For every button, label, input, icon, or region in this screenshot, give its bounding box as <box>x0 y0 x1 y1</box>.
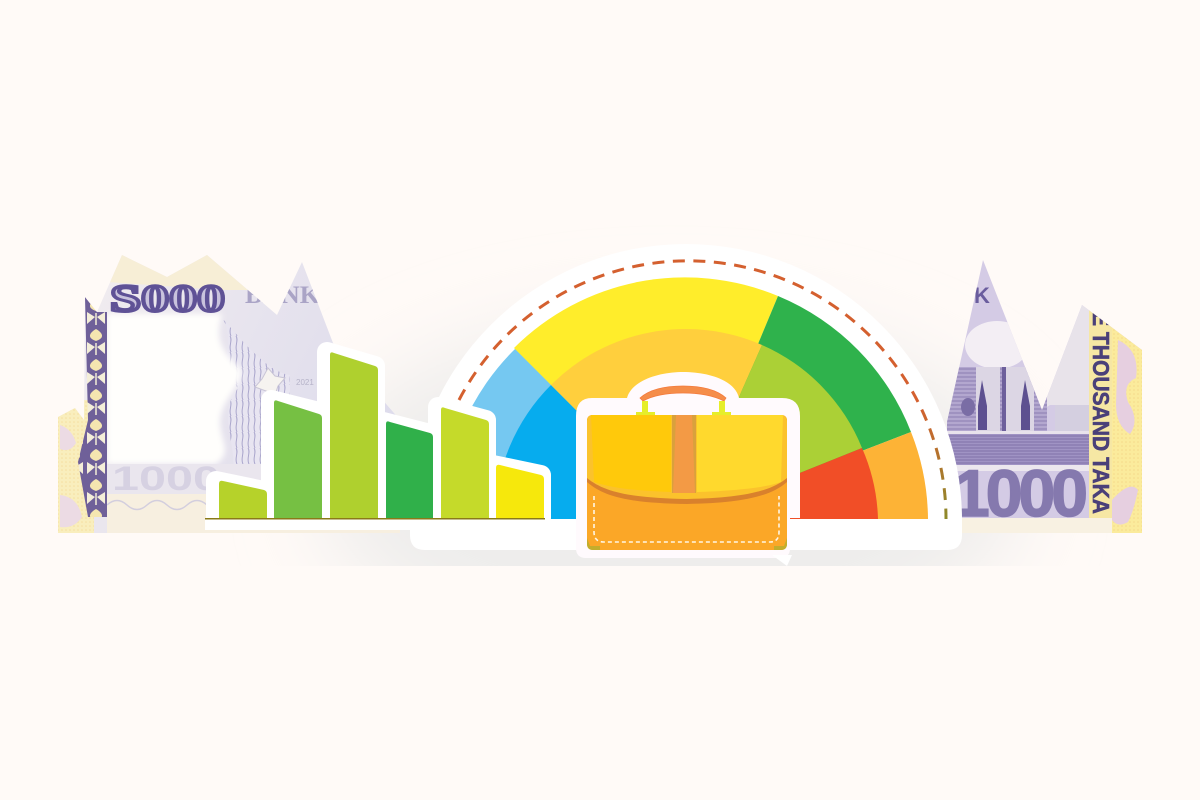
bar 4 <box>386 421 433 518</box>
sky light patch <box>1047 306 1089 407</box>
cream top corner <box>110 255 248 290</box>
inner segment: light green <box>685 345 862 519</box>
inner segment: blue <box>495 385 685 519</box>
chart white outline <box>216 352 541 518</box>
flap strap <box>672 415 696 493</box>
inner segment: red <box>685 448 878 519</box>
infographic illustration <box>58 255 1142 566</box>
bank name text: BANK <box>245 282 321 309</box>
case body <box>587 415 787 550</box>
denomination text: S000 <box>110 278 225 320</box>
bottom tint band <box>108 464 261 480</box>
star emblem <box>255 368 285 395</box>
road <box>947 434 1092 465</box>
gauge sticker <box>205 244 962 550</box>
bar 2 <box>274 400 322 518</box>
flap <box>587 415 787 504</box>
parliament building <box>947 367 1047 431</box>
thousand taka text: E THOUSAND TAKA <box>1088 312 1114 514</box>
pale band <box>947 431 1092 434</box>
dashed stitching <box>594 496 779 542</box>
white portrait window <box>107 314 241 464</box>
pink filigree <box>60 425 82 527</box>
k letter text: K <box>974 283 990 308</box>
segment: dark green <box>685 296 911 519</box>
denomination text: 1000 <box>953 456 1088 530</box>
year text: 2021 <box>296 378 314 387</box>
cloud <box>965 321 1022 367</box>
segment: yellow <box>514 277 778 519</box>
segment: orange <box>685 432 928 519</box>
flap left panel <box>591 415 671 492</box>
handle <box>640 386 726 401</box>
lavender engraved ripple <box>224 320 290 464</box>
briefcase <box>576 372 800 566</box>
bar 3 <box>330 352 378 518</box>
yellow guilloche edge <box>1112 328 1142 533</box>
inner segment: amber <box>551 329 762 519</box>
ornamental purple strip <box>78 297 107 517</box>
bar chart <box>205 352 550 530</box>
segment: light blue <box>443 348 685 519</box>
briefcase white outline <box>576 372 800 558</box>
soft shadow behind illustration <box>339 354 1001 566</box>
yellow guilloche edge <box>58 400 94 535</box>
bottom cream band <box>947 518 1112 533</box>
white sticker backing <box>410 244 962 550</box>
bar 1 <box>219 481 267 518</box>
vertical denomination strip <box>1089 310 1112 518</box>
banknote left <box>58 250 407 535</box>
white base <box>205 519 961 530</box>
faint watermark denomination: 1000 <box>112 460 220 498</box>
handle posts <box>636 401 731 415</box>
body corner tint <box>587 538 787 550</box>
dashed arc <box>459 261 946 519</box>
pink filigree <box>1112 340 1138 525</box>
flap right panel <box>697 415 783 492</box>
bar 5 <box>441 407 489 518</box>
bar 6 <box>496 465 544 518</box>
banknote right <box>945 255 1145 535</box>
baseline <box>205 518 545 520</box>
